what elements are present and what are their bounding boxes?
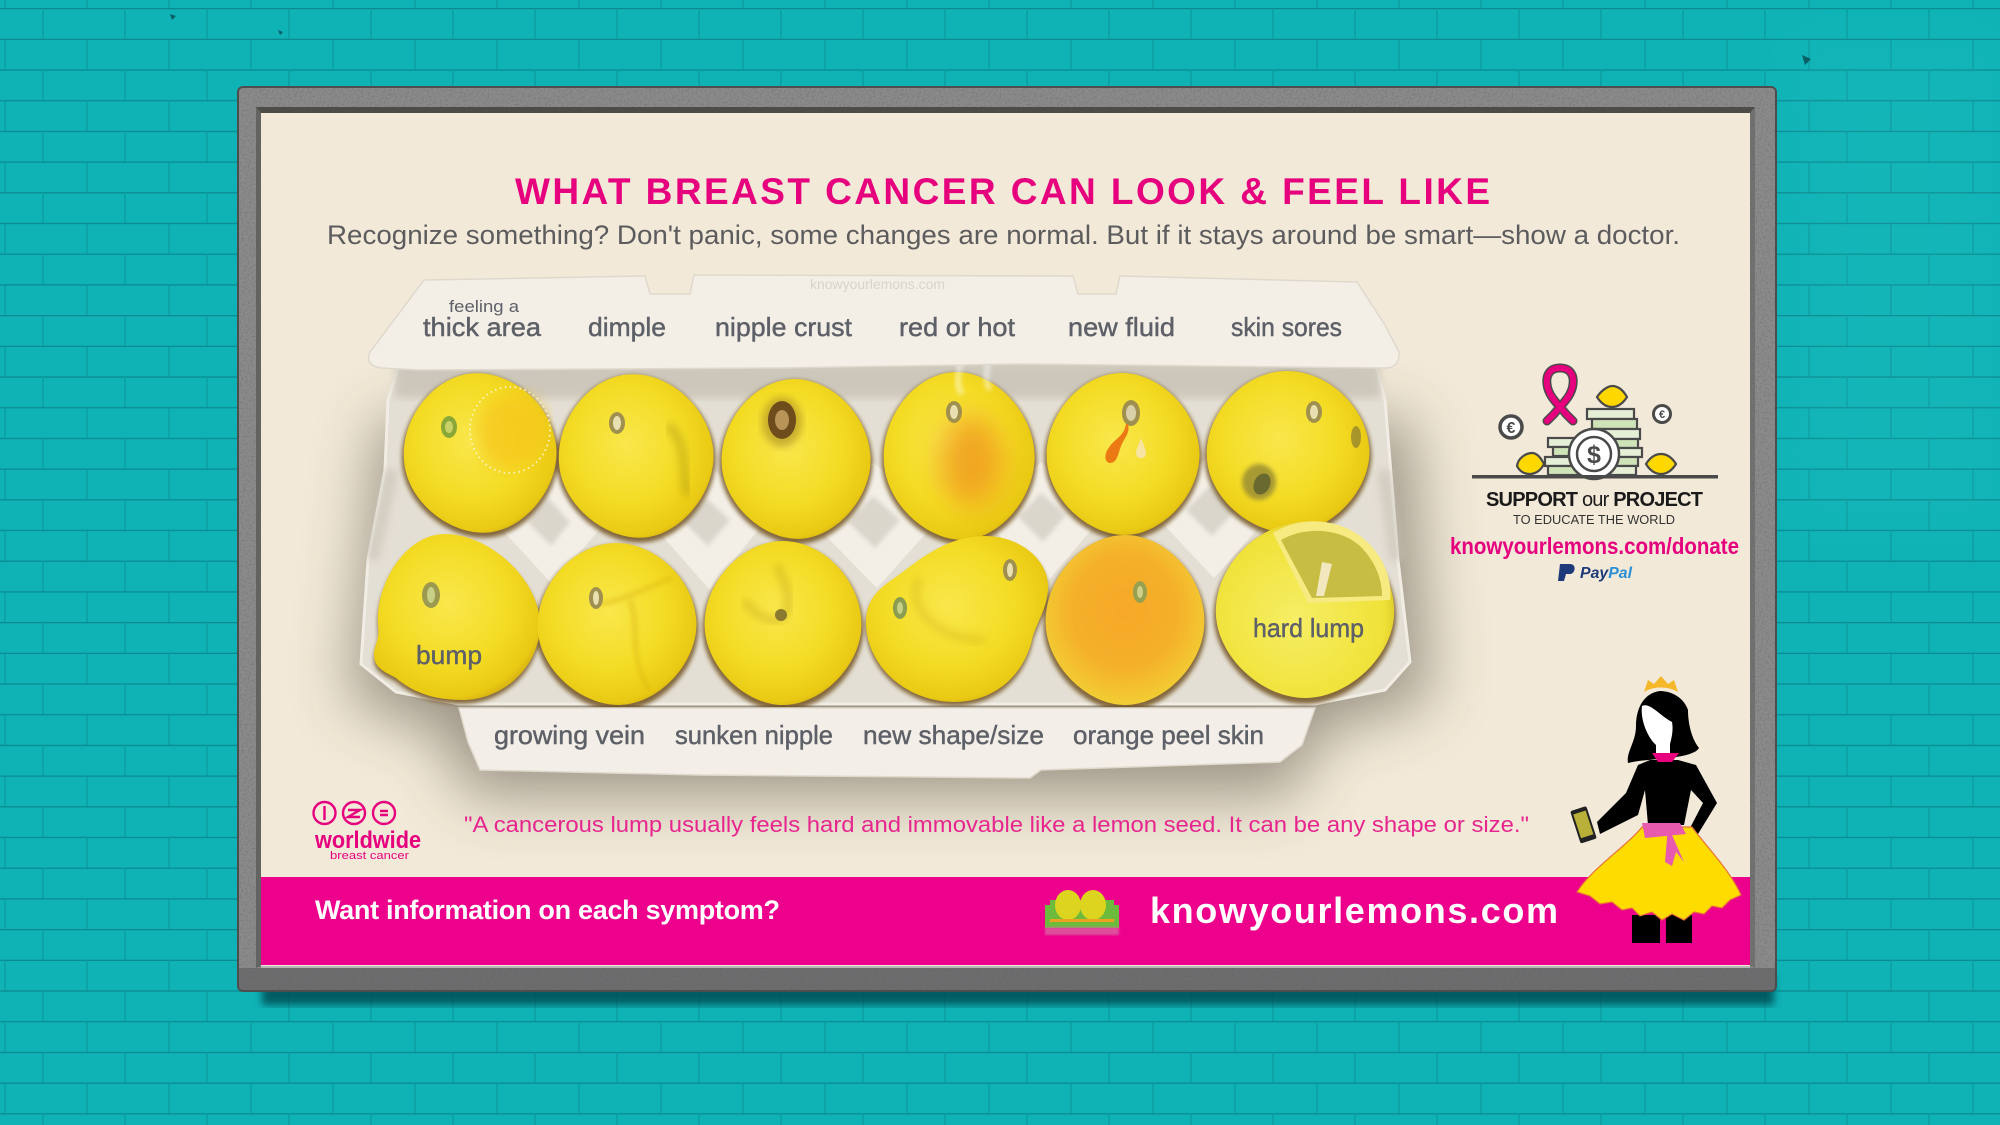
lemon: sunken nipple: [705, 541, 861, 705]
lemon: thick area: [393, 363, 567, 543]
legs: [1632, 915, 1692, 943]
label: skin sores: skin sores: [1231, 312, 1342, 342]
carton tray: [361, 362, 1410, 704]
sash and ribbon: [1642, 823, 1686, 866]
pink footer band: [261, 877, 1750, 965]
donate link: knowyourlemons.com/donate: [1450, 533, 1739, 559]
ground line: [1472, 475, 1718, 478]
label: red or hot: red or hot: [899, 312, 1016, 342]
gaps shading at row ends: [372, 470, 1396, 560]
lemon: new fluid: [1041, 368, 1205, 540]
icon: pink ribbon: [1547, 368, 1573, 421]
label: new fluid: new fluid: [1068, 312, 1175, 342]
icon: euro coin right: [1654, 406, 1670, 422]
logo tagline: breast cancer: [330, 850, 409, 862]
icon: lemons on green sofa: [1045, 890, 1119, 935]
billboard frame shadow: [262, 975, 1774, 1005]
lemon: skin sores: [1201, 366, 1375, 538]
icon: euro coin left: €: [1507, 420, 1516, 437]
label: hard lump: hard lump: [1253, 613, 1364, 643]
quote: "A cancerous lump usually feels hard and immovable like a lemon seed. It can be any shape or size.": [464, 812, 1529, 837]
lemon: new shape/size: [866, 536, 1048, 702]
support subheading: TO EDUCATE THE WORLD: [1513, 513, 1675, 527]
icon: dollar coin: [1569, 429, 1619, 479]
label: feeling a: feeling a: [449, 297, 520, 316]
title: WHAT BREAST CANCER CAN LOOK & FEEL LIKE: [515, 171, 1490, 212]
label: new shape/size: new shape/size: [863, 720, 1044, 750]
label: dimple: dimple: [588, 312, 666, 342]
tray back wall shading: [395, 362, 1380, 398]
poster panel: [261, 113, 1750, 966]
icon: euro coin left: [1500, 416, 1522, 438]
lemon: growing vein: [532, 538, 702, 710]
subtitle: Recognize something? Don't panic, some changes are normal. But if it stays around be smart—show a doctor.: [327, 220, 1680, 250]
phone: [1570, 806, 1597, 844]
icon: euro coin right: €: [1659, 409, 1665, 421]
face and neck: [1642, 705, 1673, 755]
label: orange peel skin: orange peel skin: [1073, 720, 1264, 750]
lemon: hard lump: [1216, 521, 1394, 698]
arms and torso: [1597, 760, 1717, 834]
icon: bills stack: [1545, 409, 1642, 475]
necklace: [1652, 753, 1679, 762]
hair: [1628, 691, 1699, 763]
lemon: orange peel skin: [1046, 535, 1204, 705]
watermark: knowyourlemons.com: [810, 276, 945, 292]
carton dividers: [495, 455, 1274, 590]
label: thick area: thick area: [423, 312, 542, 342]
logo wordmark: worldwide: [314, 827, 421, 854]
lemon: nipple crust: [716, 374, 876, 544]
carton front flap: [459, 708, 1315, 778]
website url: knowyourlemons.com: [1150, 890, 1558, 931]
carton drop shadow: [350, 420, 1430, 795]
worldwide breast cancer logo: [314, 802, 421, 862]
support heading: SUPPORT our PROJECT: [1486, 489, 1703, 511]
label: growing vein: growing vein: [494, 720, 645, 750]
lemon: bump: [374, 534, 540, 700]
lemon: dimple: [548, 364, 724, 548]
label: sunken nipple: sunken nipple: [675, 720, 833, 750]
carton lid: [368, 275, 1399, 370]
egg carton with lemons: [361, 275, 1410, 778]
label: nipple crust: nipple crust: [715, 312, 853, 342]
tiara: [1644, 676, 1678, 692]
character: woman with phone: [1570, 676, 1741, 943]
paypal logo: [1558, 564, 1633, 582]
icon: lemons: [1517, 386, 1676, 474]
paypal logo: PayPal: [1580, 565, 1633, 582]
lemon: red or hot: [875, 345, 1043, 547]
skirt: [1577, 827, 1741, 920]
footer question: Want information on each symptom?: [315, 895, 780, 925]
donation illustration: [1472, 368, 1718, 479]
lemon cup shadows: [374, 364, 1396, 716]
billboard frame: [238, 87, 1776, 991]
logo icons: [314, 802, 395, 824]
label: bump: bump: [416, 640, 482, 670]
icon: dollar coin: $: [1587, 441, 1601, 469]
